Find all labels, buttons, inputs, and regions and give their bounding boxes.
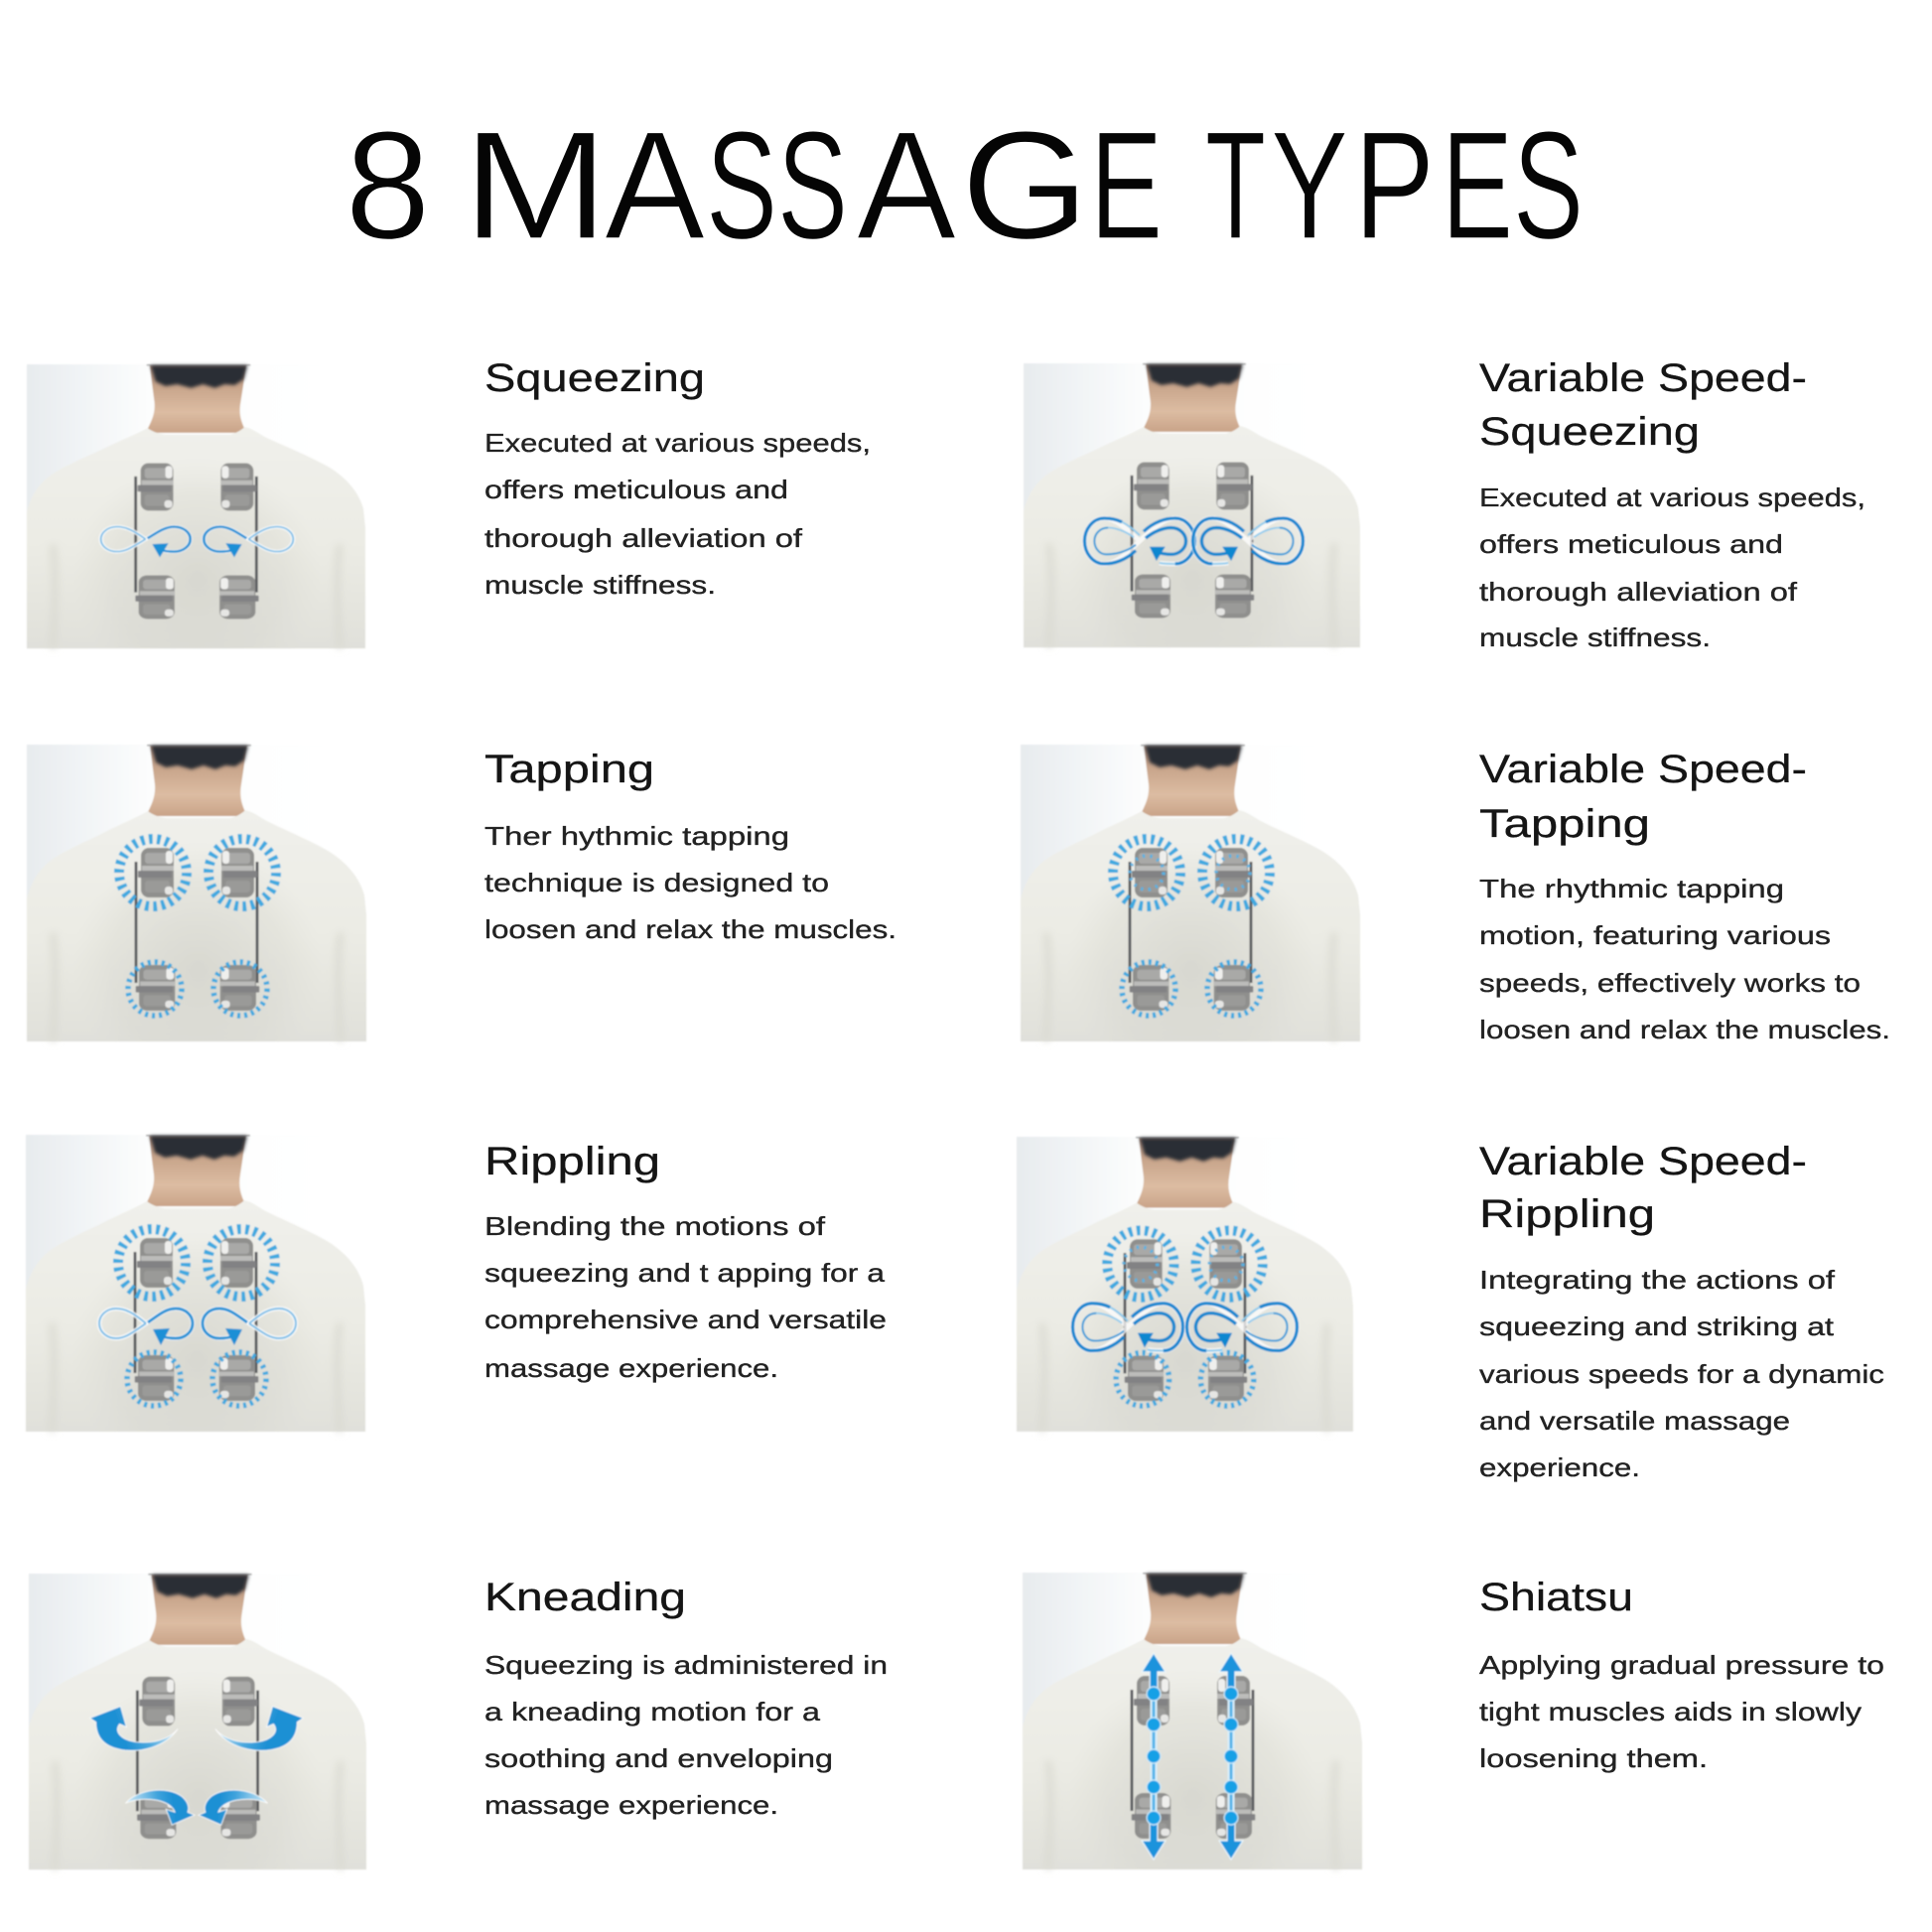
heading: variable speed rippling [1479, 1140, 1807, 1236]
title: S [706, 99, 777, 271]
description: squeezing: Executed at various speeds, [484, 428, 871, 458]
illustration: variable speed squeezing [1024, 363, 1360, 647]
description: rippling: Blending the motions of [484, 1211, 826, 1241]
heading: variable speed tapping: Variable Speed- [1479, 748, 1807, 791]
title: S [1513, 99, 1584, 271]
heading: variable speed rippling: Variable Speed- [1479, 1140, 1807, 1183]
panel: variable speed rippling [1017, 1137, 1884, 1482]
description: tapping: technique is designed to [484, 868, 829, 897]
description: variable speed rippling: experience. [1479, 1452, 1640, 1482]
description: variable speed rippling: squeezing and striking at [1479, 1311, 1835, 1341]
description: variable speed rippling: Integrating the actions of [1479, 1265, 1836, 1295]
title: S [777, 99, 848, 271]
heading: variable speed squeezing: Squeezing [1479, 410, 1700, 454]
title: 8 [345, 99, 431, 271]
title: A [605, 99, 706, 271]
title: Y [1271, 99, 1348, 271]
illustration: shiatsu [1023, 1573, 1362, 1869]
panel: variable speed squeezing [1024, 356, 1865, 652]
panel: squeezing [27, 356, 871, 648]
description: squeezing: offers meticulous and [484, 475, 788, 504]
heading: variable speed squeezing: Variable Speed- [1479, 356, 1807, 400]
illustration: variable speed tapping [1021, 745, 1360, 1041]
description: squeezing [484, 428, 871, 600]
description: rippling: squeezing and t apping for a [484, 1258, 886, 1288]
description: tapping [484, 821, 897, 944]
description: kneading: soothing and enveloping [484, 1743, 833, 1773]
heading: shiatsu: Shiatsu [1479, 1576, 1633, 1619]
description: variable speed squeezing: Executed at various speeds, [1479, 483, 1865, 512]
title: A [857, 99, 957, 271]
description: variable speed rippling [1479, 1265, 1884, 1482]
illustration: squeezing [27, 364, 365, 648]
heading: rippling: Rippling [484, 1140, 660, 1183]
illustration: rippling [26, 1135, 365, 1432]
description: variable speed tapping: speeds, effectively works to [1479, 968, 1861, 998]
title: E [1090, 99, 1163, 271]
description: kneading: massage experience. [484, 1790, 778, 1820]
panel: rippling [26, 1135, 887, 1432]
description: tapping: Ther hythmic tapping [484, 821, 789, 851]
description: rippling: comprehensive and versatile [484, 1305, 887, 1334]
title: E [1442, 99, 1513, 271]
title: M [463, 99, 609, 271]
heading: variable speed rippling: Rippling [1479, 1192, 1655, 1236]
description: shiatsu: Applying gradual pressure to [1479, 1650, 1884, 1680]
description: variable speed rippling: and versatile massage [1479, 1406, 1790, 1436]
description: variable speed rippling: various speeds for a dynamic [1479, 1359, 1884, 1389]
description: kneading: a kneading motion for a [484, 1697, 821, 1726]
description: rippling [484, 1211, 887, 1383]
panel: variable speed tapping [1021, 745, 1890, 1044]
title: T [1205, 99, 1266, 271]
description: variable speed squeezing [1479, 483, 1865, 652]
description: shiatsu: tight muscles aids in slowly [1479, 1697, 1862, 1726]
description: squeezing: muscle stiffness. [484, 570, 716, 600]
heading: squeezing: Squeezing [484, 356, 705, 400]
heading: variable speed squeezing [1479, 356, 1807, 454]
description: kneading [484, 1650, 888, 1820]
heading: tapping: Tapping [484, 748, 654, 791]
panel: shiatsu [1023, 1573, 1884, 1869]
description: squeezing: thorough alleviation of [484, 523, 803, 553]
description: variable speed squeezing: thorough alleviation of [1479, 577, 1798, 607]
illustration: variable speed rippling [1017, 1137, 1353, 1432]
description: kneading: Squeezing is administered in [484, 1650, 888, 1680]
illustration: tapping [27, 745, 366, 1041]
description: variable speed squeezing: offers meticulous and [1479, 529, 1783, 559]
description: variable speed tapping: motion, featuring various [1479, 920, 1831, 950]
panel: tapping [27, 745, 897, 1041]
heading: kneading: Kneading [484, 1576, 686, 1619]
panel: kneading [29, 1574, 888, 1869]
description: variable speed tapping: loosen and relax the muscles. [1479, 1015, 1890, 1044]
description: shiatsu: loosening them. [1479, 1743, 1708, 1773]
heading: variable speed tapping [1479, 748, 1807, 846]
description: rippling: massage experience. [484, 1353, 778, 1383]
description: variable speed tapping [1479, 874, 1890, 1044]
title: P [1354, 99, 1435, 271]
heading: variable speed tapping: Tapping [1479, 802, 1650, 846]
title: G [961, 99, 1089, 271]
description: variable speed squeezing: muscle stiffness. [1479, 622, 1711, 652]
description: shiatsu [1479, 1650, 1884, 1773]
illustration: kneading [29, 1574, 366, 1869]
description: tapping: loosen and relax the muscles. [484, 914, 897, 944]
description: variable speed tapping: The rhythmic tapping [1479, 874, 1784, 903]
